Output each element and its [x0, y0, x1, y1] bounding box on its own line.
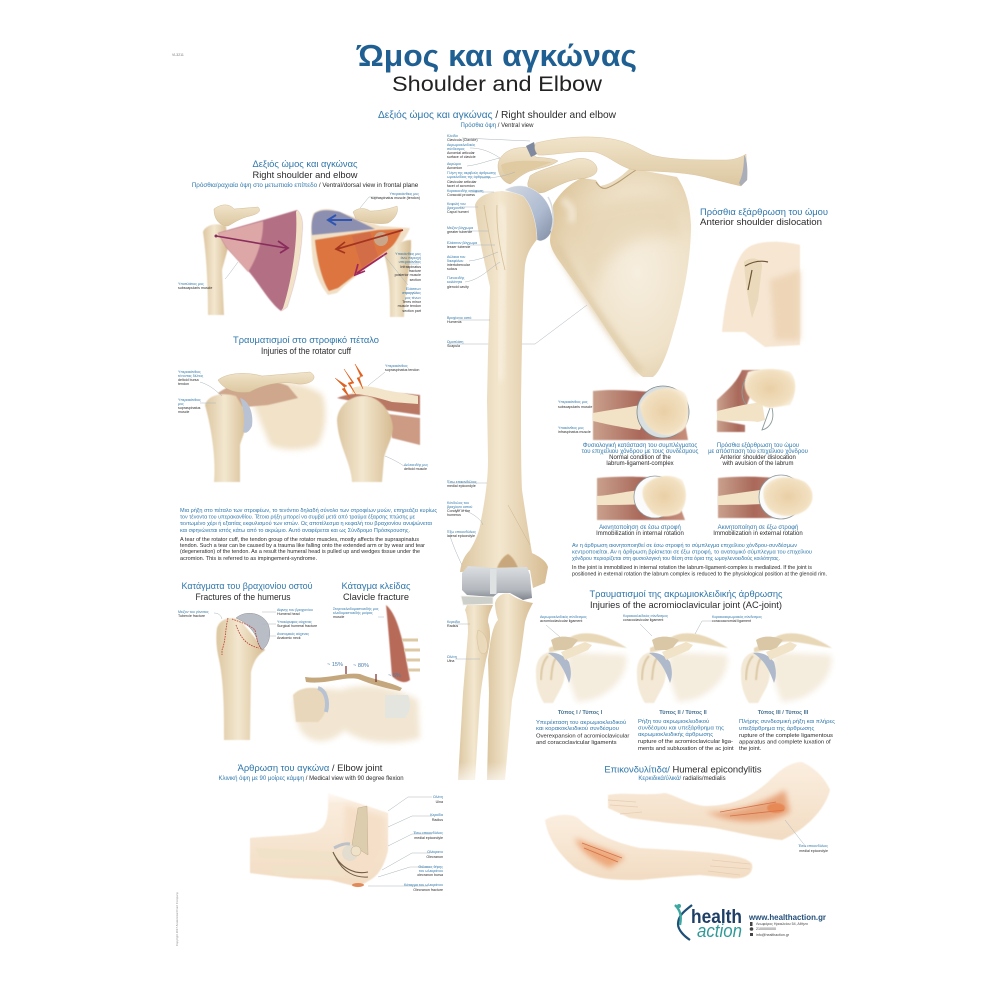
- text block: labrum explanation: χόνδρου περιορίζεται στη φυσιολογική του θέση στα όρια της ωμογλενοειδούς κοιλότητας.: [572, 555, 780, 562]
- chest shading: [770, 270, 800, 340]
- text block: rotator cuff explanation: A tear of the rotator cuff, the tendon group of the rotator muscles, mostly affects the supraspinatus: [180, 537, 419, 543]
- cervical vertebrae: [402, 640, 420, 670]
- humeral head cartilage: [505, 186, 553, 241]
- main figure labels: intertubercular: [447, 263, 471, 267]
- label: [333, 607, 384, 619]
- poster code: VL3211: [172, 53, 184, 57]
- labrum captions: Ακινητοποίηση σε έσω στροφή: [599, 524, 681, 531]
- text block: rotator cuff explanation: και σφηνώνεται ιστός κάτω από το ακρώμιο. Αυτό αναφέρεται και ως Σύνδρομο Πρόσκρουσης.: [180, 527, 410, 534]
- labrum captions: Immobilization in external rotation: [713, 531, 803, 537]
- dorsal humerus: [384, 240, 411, 317]
- labels: section part: [402, 309, 421, 313]
- shoulder bones: [744, 259, 762, 318]
- labels: [368, 795, 443, 892]
- percent labels: ~ 15%: [327, 662, 343, 668]
- main figure labels: greater tubercle: [447, 230, 472, 234]
- main figure labels: Ωμοπλάτη: [447, 340, 463, 344]
- logo: health action: Λεωφόρος Ηρακλείου 54, Αθήνα: [756, 922, 808, 926]
- main figure labels: Κερκίδα: [447, 620, 460, 624]
- forearm bones: [255, 848, 345, 876]
- main figure labels: lesser tubercle: [447, 245, 470, 249]
- main figure heading: Δεξιός ώμος και αγκώνας / Right shoulder and elbow: [378, 109, 617, 121]
- panel: labrum external rotation: [718, 475, 813, 519]
- labrum captions: του επιχείλιου χόνδρου με τους συνδέσμους: [582, 448, 698, 455]
- radial tuberosity: [477, 630, 487, 654]
- main figure labels: Condyle of the: [447, 509, 470, 513]
- fracture ticks: [346, 666, 376, 682]
- clavicle: [535, 137, 747, 186]
- text block: rotator cuff explanation: τεντωμένο χέρι ή εξαιτίας εκφυλισμού των ιστών. Ως αποτέλεσμα η κεφαλή του βραχιονίου ανυψώνεται: [180, 520, 433, 527]
- humerus: [205, 394, 248, 482]
- labels: subscapularis muscle: [178, 286, 212, 290]
- labrum captions: Anterior shoulder dislocation: [720, 455, 796, 461]
- section heading: humeral epicondylitis: Κερκιδικά/ύλικά/ radialis/medialis: [638, 775, 726, 782]
- labrum captions: Φυσιολογική κατάσταση του συμπλέγματος: [583, 442, 697, 449]
- AC joint ligament labels: Κορακοακρωμιακός σύνδεσμος: [712, 615, 762, 619]
- olecranon bursa: [352, 883, 364, 887]
- acromion: [218, 372, 314, 392]
- main figure labels: δικεφάλου: [447, 259, 463, 263]
- section heading: anterior shoulder dislocation: [700, 206, 828, 227]
- main figure labels: ωμοκλείδιας της άρθρωσης: [447, 175, 491, 179]
- clavicle bone: [305, 674, 402, 691]
- labels: Υποπλάτιος μυς: [178, 282, 204, 286]
- ulna: [487, 593, 533, 780]
- head cartilage: [236, 613, 270, 650]
- panel: labrum condition normal: Υπερακάνθιος μυς: [558, 400, 588, 404]
- labels: posterior muscle: [395, 273, 421, 277]
- shoulder cartilage: [318, 688, 327, 712]
- main figure labels: medial epicondyle: [447, 484, 476, 488]
- main figure labels: Έξω επικονδύλιος: [446, 530, 476, 534]
- labrum captions: Immobilization in internal rotation: [596, 531, 684, 537]
- labrum captions: Πρόσθια εξάρθρωση του ώμου: [717, 442, 799, 449]
- labels: section: [410, 278, 421, 282]
- labels: άνω περιοχή: [401, 256, 421, 260]
- panel: AC joint type II illustration: [637, 633, 728, 703]
- labels: Έσω επικονδύλιος: [412, 831, 443, 835]
- AC injury type captions: the joint.: [739, 746, 762, 752]
- main figure labels: glenoid cavity: [447, 285, 469, 289]
- text block: labrum explanation: In the joint is immobilized in internal rotation the labrum-ligament-complex is medialized. If the joint is: [572, 565, 812, 571]
- main figure labels: lateral epicondyle: [447, 534, 475, 538]
- arrows on dorsal scapula: [328, 215, 403, 275]
- AC injury type captions: ακρωμιοκλειδικής άρθρωσης: [638, 731, 713, 738]
- AC joint ligament labels: coracoacromial ligament: [712, 619, 751, 623]
- shoulder skin: [722, 242, 800, 347]
- acromioclavicular joint disc: [526, 142, 537, 157]
- panel: labrum condition normal: Υπακάνθιος μυς: [558, 426, 584, 430]
- section heading: clavicle fracture: [342, 580, 411, 602]
- labels: muscle tendon: [398, 304, 421, 308]
- ventral acromion and clavicle: [214, 205, 260, 226]
- main figure labels: σύνδεσμος: [447, 147, 465, 151]
- panel: labrum condition normal: subscapularis muscle: [558, 405, 592, 409]
- section heading: right shoulder and elbow (left panel): Δεξιός ώμος και αγκώνας: [252, 158, 358, 169]
- text block: labrum explanation: [572, 542, 827, 578]
- main figure labels: Ακρωμιοκλειδικός: [447, 143, 475, 147]
- AC joint ligament labels: Ακρωμιοκλειδικός σύνδεσμος: [540, 615, 587, 619]
- labrum captions: με απόσπαση του επιχείλιου χόνδρου: [708, 448, 808, 455]
- AC injury type captions: [536, 710, 835, 752]
- section heading: elbow joint: Άρθρωση του αγκώνα / Elbow joint: [238, 762, 383, 773]
- main figure labels: Μείζον βόγχωμα: [447, 226, 473, 230]
- text block: labrum explanation: positioned in external rotation the labrum complex is reduced to the physiological position at the glenoid rim.: [572, 572, 827, 578]
- main figure labels: Humerus: [447, 320, 462, 324]
- fracture and acromion detail: [745, 261, 768, 290]
- labels: Humeral head: [277, 612, 300, 616]
- AC injury type captions: συνδέσμου και υπεξάρθρημα της: [638, 724, 724, 732]
- AC injury type captions: υπεξάρθρημα της άρθρωσης: [739, 725, 814, 732]
- label: muscle: [333, 615, 344, 619]
- AC joint ligament labels: [540, 614, 762, 637]
- epicondylitis label: Έσω επικονδύλιος: [797, 844, 828, 848]
- humeral head: [337, 396, 393, 482]
- panel: anterior shoulder dislocation illustration: [722, 242, 800, 347]
- labels: fracture: [409, 269, 421, 273]
- joint: [333, 844, 368, 877]
- labels: deltoid bursa: [178, 378, 199, 382]
- main figure labels: Γλήνη της ακριβούς άρθρωσης: [447, 171, 496, 175]
- section heading: rotator cuff injuries: Τραυματισμοί στο στροφικό πέταλο: [233, 334, 379, 345]
- labels: [178, 192, 422, 313]
- logo: health action: www.healthaction.gr: [748, 913, 826, 922]
- scapula blade: [248, 382, 325, 450]
- labels: Υποκόρυφος αύχενας: [277, 620, 312, 624]
- infraspinatus head circle: [374, 232, 388, 246]
- text block: rotator cuff explanation: [180, 507, 437, 562]
- main figure labels: Ulna: [447, 659, 454, 663]
- labels: μυς: [178, 402, 184, 406]
- title: Ώμος και αγκώνας: [356, 38, 637, 73]
- section heading: right shoulder and elbow (left panel): [192, 158, 419, 189]
- AC injury type captions: ments and subluxation of the ac joint: [638, 746, 734, 752]
- main figure labels: Έσω επικονδύλιος: [446, 480, 477, 484]
- percent labels: ~ 80%: [353, 663, 369, 669]
- epicondylitis label: medial epicondyle: [799, 849, 828, 853]
- elbow cartilage: [462, 566, 532, 600]
- section heading: right shoulder and elbow (left panel): Right shoulder and elbow: [252, 169, 358, 180]
- section heading: clavicle fracture: Clavicle fracture: [343, 591, 409, 602]
- logo icon: [675, 904, 692, 940]
- main figure heading: Πρόσθια όψη / Ventral view: [461, 122, 534, 129]
- scapula: [550, 168, 691, 377]
- main figure labels: βραχίονα οστού: [447, 505, 472, 509]
- AC injury type captions: and coracoclavicular ligaments: [536, 740, 617, 746]
- panel: humerus fractures illustration: [178, 608, 317, 740]
- AC joint ligament labels: coracoclavicular ligament: [623, 618, 663, 622]
- fingers: [708, 860, 750, 875]
- labels: Υπακάνθιος μυς: [395, 252, 421, 256]
- ventral scapula muscle: [218, 210, 302, 311]
- fade top of arm: [322, 788, 394, 804]
- section heading: rotator cuff injuries: [233, 334, 379, 356]
- main figure labels: Αύλακα του: [447, 255, 465, 259]
- ventral humerus: [203, 224, 228, 315]
- radial head disc: [461, 596, 493, 605]
- main figure labels: [446, 134, 530, 663]
- trochlear groove: [490, 569, 496, 594]
- labels: supraspinatus tendon: [385, 368, 419, 372]
- main figure labels: humerus: [447, 513, 461, 517]
- section heading: elbow joint: [218, 762, 404, 782]
- muscle: [337, 392, 420, 415]
- labrum captions: [582, 442, 808, 537]
- logo: health action: action: [697, 921, 742, 941]
- section heading: humeral epicondylitis: [604, 764, 762, 782]
- main figure labels: Acromion: [447, 166, 462, 170]
- glenoid labrum: [548, 197, 553, 231]
- main figure labels: Βραχίονιο οστό: [447, 316, 471, 320]
- AC injury type captions: Υπερέκταση του ακρωμιοκλειδικού: [536, 719, 626, 726]
- AC injury type captions: Τύπος III / Τύπος III: [758, 710, 809, 716]
- section heading: clavicle fracture: Κάταγμα κλείδας: [342, 580, 411, 591]
- panel: epicondylitis upper arm: [608, 762, 830, 840]
- main figure labels: Radius: [447, 624, 458, 628]
- main figure heading: [378, 109, 617, 129]
- labels: Υπερακάνθιος: [385, 364, 408, 368]
- text block: rotator cuff explanation: acromion. This is referred to as impingement-syndrome.: [180, 556, 317, 562]
- panel: rotator cuff left illustration: [178, 370, 325, 482]
- section heading: AC-joint injuries: Injuries of the acromioclavicular joint (AC-joint): [590, 599, 782, 610]
- logo: health action: health: [691, 906, 742, 928]
- AC joint ligament labels: Κορακοκλειδικός σύνδεσμος: [623, 614, 668, 618]
- logo: health action: 2100000000: [756, 927, 776, 931]
- main figure labels: κοιλότητα: [447, 280, 462, 284]
- humeral head: [293, 688, 327, 722]
- AC injury type captions: και κορακοκλειδικού συνδέσμου: [536, 725, 619, 732]
- coracoid process: [528, 158, 597, 193]
- labels: tendon: [178, 382, 189, 386]
- muscle tendons: [218, 381, 298, 408]
- panel: clavicle fracture illustration: [293, 605, 420, 743]
- fracture lines: [222, 618, 262, 655]
- label: Στερνοκλειδομαστοειδής μυς: [333, 607, 379, 611]
- panel: rotator cuff impingement illustration: [335, 364, 428, 482]
- labrum captions: Ακινητοποίηση σε έξω στροφή: [718, 524, 798, 531]
- fade at distal forearm: [450, 762, 520, 792]
- AC injury type captions: rupture of the complete ligamentous: [739, 733, 833, 739]
- labels: supraspinatus: [178, 406, 201, 410]
- panel: AC joint type III illustration: [741, 633, 832, 703]
- labels: Κερκίδα: [430, 813, 443, 817]
- labels: Olecranon: [426, 855, 443, 859]
- acromion: [352, 386, 418, 404]
- acromion: [498, 147, 558, 184]
- text block: labrum explanation: Αν η άρθρωση ακινητοποιηθεί σε έσω στροφή το σύμπλεγμα επιχείλιου χόνδρου-συνδέσμων: [572, 542, 797, 549]
- skin glow: [345, 805, 385, 880]
- section heading: humeral epicondylitis: Επικονδυλίτιδα/ Humeral epicondylitis: [604, 764, 762, 774]
- title: Shoulder and Elbow: [392, 73, 603, 96]
- labels: Infraspinatus: [400, 265, 421, 269]
- epicondylitis label: [785, 820, 828, 853]
- labels: Υπερακάνθιος μυς: [389, 192, 419, 196]
- percent labels: [327, 662, 401, 679]
- panel: labrum condition normal: infraspinatus muscle: [558, 430, 591, 434]
- panel: scapula ventral and dorsal views: [178, 192, 422, 317]
- main figure labels: Κεφαλή του: [447, 202, 466, 206]
- main figure labels: Κόνδυλος του: [447, 501, 469, 505]
- main figure labels: Clavicular articular: [447, 180, 477, 184]
- leader line to scapula: [448, 305, 587, 344]
- main figure labels: Γλενοειδής: [447, 276, 465, 280]
- ventral arrow: [214, 234, 288, 253]
- labels: Olecranon fracture: [413, 888, 443, 892]
- main figure labels: Acromial articular: [447, 151, 476, 155]
- main figure labels: Caput humeri: [447, 210, 469, 214]
- text block: rotator cuff explanation: Μια ρήξη στο πέταλο των στροφέων, το τενόντιο δηλαδή σύνολο των στροφέων μυών, επηρεάζει κυρίως: [180, 507, 437, 514]
- main figure labels: Ωλένη: [447, 655, 457, 659]
- text block: rotator cuff explanation: (degeneration) of the tendon. As a result the humeral head is pulled up and wedges tissue under the: [180, 549, 420, 555]
- section heading: fractures of the humerus: [182, 580, 312, 602]
- main figure labels: Κλείδα: [447, 134, 458, 138]
- labels: deltoid muscle: [404, 467, 427, 471]
- labrum captions: with avulsion of the labrum: [721, 461, 794, 467]
- labels: [178, 370, 222, 414]
- section heading: fractures of the humerus: Κατάγματα του βραχιονίου οστού: [182, 580, 312, 591]
- AC injury type captions: Πλήρης συνδεσμική ρήξη και πλήρες: [739, 718, 835, 725]
- labels: υπερακάνθιος: [399, 260, 421, 264]
- dorsal scapula: [311, 209, 410, 295]
- glenoid cartilage: [240, 398, 252, 433]
- lower muscle: [388, 414, 420, 445]
- fingers: [608, 800, 642, 814]
- section heading: anterior shoulder dislocation: Πρόσθια εξάρθρωση του ώμου: [700, 206, 828, 217]
- labels: Δελτοειδής μυς: [404, 463, 428, 467]
- AC injury type captions: Overexpansion of acromioclavicular: [536, 734, 629, 740]
- labels: μυς τένων: [405, 296, 421, 300]
- AC injury type captions: rupture of the acromioclavicular liga-: [638, 739, 733, 745]
- section heading: rotator cuff injuries: Injuries of the rotator cuff: [261, 345, 351, 356]
- ribs: [385, 695, 410, 718]
- percent labels: ~ 5%: [388, 673, 401, 679]
- text block: labrum explanation: κεντροποιείται. Αν η άρθρωση βρίσκεται σε έξω στροφή, το ανατομικό σύμπλεγμα του επιχείλιου: [572, 548, 812, 556]
- labels: Ανατομικός αύχενας: [277, 632, 309, 636]
- panel: labrum condition normal: [558, 386, 689, 440]
- main figure labels: Ελάσσον βόγχωμα: [447, 241, 477, 245]
- sternocleidomastoid muscle: [386, 605, 410, 682]
- panel: elbow joint illustration: [250, 788, 443, 892]
- labels: olecranon bursa: [417, 873, 443, 877]
- panel: AC joint type I illustration: [536, 633, 627, 703]
- AC injury type captions: Τύπος I / Τύπος I: [558, 710, 603, 716]
- labels: [368, 364, 428, 471]
- section heading: right shoulder and elbow (left panel): Πρόσθια/ραχιαία όψη στο μετωπιαίο επίπεδο / Ventral/dorsal view in frontal plane: [192, 181, 419, 189]
- labels: Tubercle fracture: [178, 614, 205, 618]
- rib cage and shoulder: [294, 686, 420, 743]
- arm outline: [250, 793, 388, 887]
- labels: Υπερακάνθιος: [178, 370, 201, 374]
- labrum captions: labrum-ligament-complex: [606, 461, 674, 467]
- section heading: AC-joint injuries: Τραυματισμοί της ακρωμιοκλειδικής άρθρωσης: [590, 588, 783, 599]
- main figure labels: Κορακοειδής απόφυση: [447, 189, 483, 193]
- labels: Ulna: [436, 800, 443, 804]
- dorsal spine of scapula: [353, 206, 398, 224]
- main figure labels: facet of acromion: [447, 184, 475, 188]
- labels: Ωλένη: [433, 795, 443, 799]
- labels: [178, 608, 317, 640]
- labels: τένοντας δέλτος: [178, 374, 204, 378]
- clavicle sternal end cartilage: [739, 155, 747, 186]
- humerus bone: [216, 618, 265, 740]
- label: κλειδομαστοειδής μοίρας: [333, 611, 373, 615]
- section heading: elbow joint: Κλινική όψη με 90 μοίρες κάμψη / Medical view with 90 degree flexion: [218, 775, 404, 782]
- acromion shadow: [501, 161, 552, 180]
- labels: Μείζον του γόνατος: [178, 610, 209, 614]
- AC injury type captions: Τύπος II / Τύπος II: [659, 710, 707, 716]
- labels: Υπερακάνθιος: [178, 398, 201, 402]
- panel: labrum internal rotation: [597, 476, 686, 520]
- lightning icon: [335, 364, 363, 398]
- logo: health action: info@healthaction.gr: [756, 933, 790, 937]
- main figure labels: Ακρώμιο: [447, 162, 461, 166]
- labels: Surgical humeral fracture: [277, 624, 317, 628]
- labels: supraspinatus muscle (tendon): [371, 196, 420, 200]
- section heading: AC-joint injuries: [590, 588, 783, 610]
- labels: στρογγύλος: [402, 291, 421, 295]
- labels: Αίφνης του βραχιονίου: [277, 608, 313, 612]
- labrum captions: Normal condition of the: [609, 455, 672, 461]
- main figure labels: Scapula: [447, 344, 460, 348]
- section heading: fractures of the humerus: Fractures of the humerus: [196, 591, 291, 602]
- text block: rotator cuff explanation: τον τένοντα του υπερακανθίου. Τέτοια ρήξη μπορεί να συμβεί μετά από τραύμα έξαρσης πτώσης με: [180, 514, 416, 520]
- title: [356, 38, 637, 96]
- main figure labels: surface of clavicle: [447, 155, 476, 159]
- labels: Anatomic neck: [277, 636, 301, 640]
- radius: [458, 605, 493, 780]
- AC joint ligament labels: acromioclavicular ligament: [540, 619, 582, 623]
- labels: Κάταγμα του ωλεκράνου: [404, 883, 443, 887]
- panel: labrum condition dislocated: [717, 369, 795, 432]
- labels: Ελάσσων: [406, 287, 421, 291]
- text block: rotator cuff explanation: tendon. Such a tear can be caused by a trauma like falling onto the extended arm or by wear and tear: [180, 543, 425, 549]
- main figure labels: Coracoid process: [447, 193, 475, 197]
- AC injury type captions: apparatus and complete luxation of: [739, 740, 831, 746]
- main illustration: shoulder and arm bones: [448, 137, 747, 792]
- labels: Radius: [432, 818, 443, 822]
- main figure labels: βραχιονίου: [447, 206, 464, 210]
- section heading: anterior shoulder dislocation: Anterior shoulder dislocation: [700, 216, 822, 227]
- labels: Teres minor: [402, 300, 422, 304]
- logo: health action: [675, 904, 826, 941]
- humerus: [352, 806, 368, 855]
- copyright note: Copyright 2017 Anatomical Chart Company: [175, 892, 179, 946]
- panel: epicondylitis lower arm: [545, 815, 752, 880]
- labels: Ωλέκρανο: [427, 850, 443, 854]
- labels: Θύλακος θήκης: [418, 865, 443, 869]
- labels: του ωλεκράνου: [419, 869, 443, 873]
- labels: muscle: [178, 410, 189, 414]
- humerus: [460, 191, 548, 588]
- AC injury type captions: Ρήξη του ακρωμιοκλειδικού: [638, 718, 709, 725]
- main figure labels: sulcus: [447, 267, 457, 271]
- main figure labels: Clavicula (Clavicle): [447, 138, 478, 142]
- labels: medial epicondyle: [414, 836, 443, 840]
